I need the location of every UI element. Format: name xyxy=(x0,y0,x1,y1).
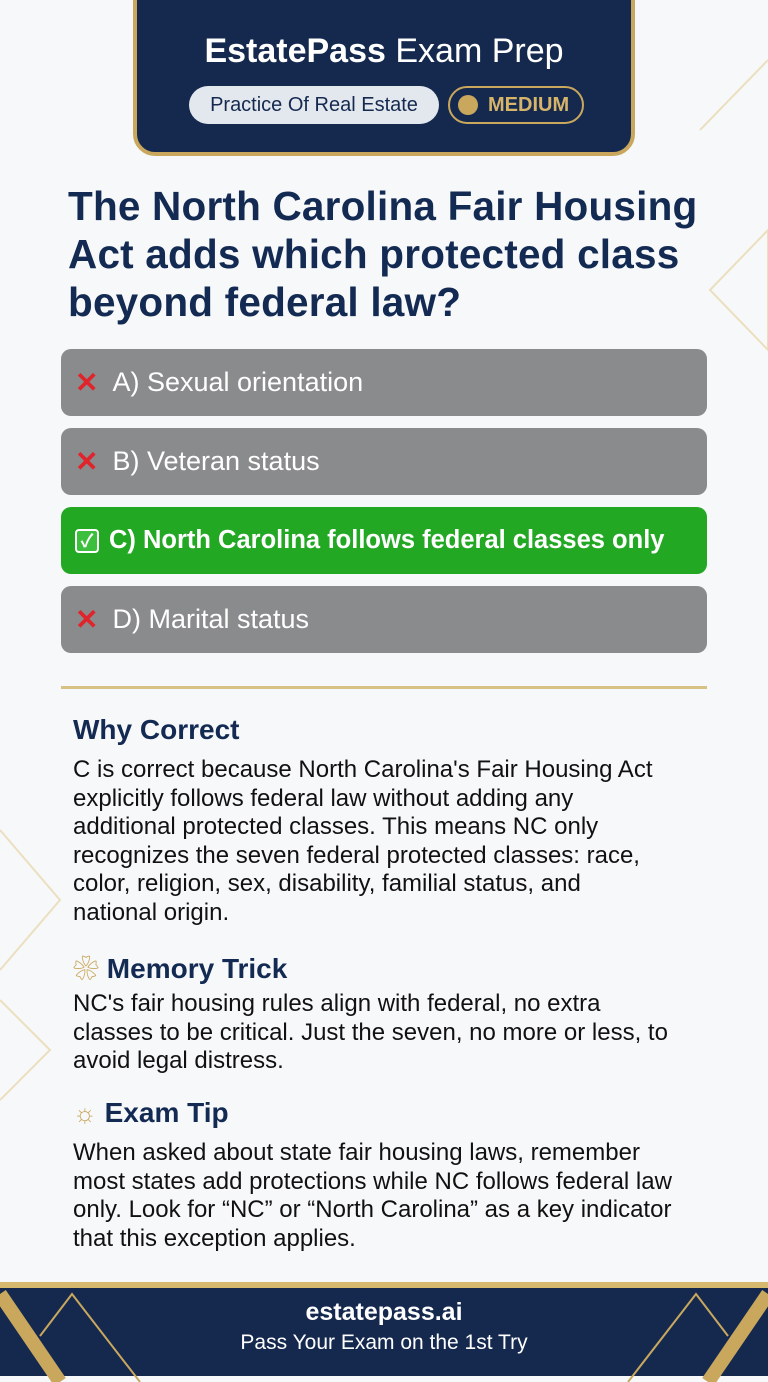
why correct text xyxy=(73,756,652,926)
memory trick text: avoid legal distress. xyxy=(73,1047,284,1074)
why correct text: recognizes the seven federal protected classes: race, xyxy=(73,842,640,868)
question: Act adds which protected class xyxy=(68,231,679,277)
option D: D) Marital status xyxy=(112,604,309,634)
why correct heading: Why Correct xyxy=(73,714,239,745)
category pill: Practice Of Real Estate xyxy=(210,94,418,116)
option A: ✕ xyxy=(75,367,98,398)
footer text: Pass Your Exam on the 1st Try xyxy=(240,1331,528,1354)
header title: EstatePass Exam Prep xyxy=(204,32,564,70)
why correct text: additional protected classes. This means NC only xyxy=(73,813,598,840)
exam tip text: most states add protections while NC follows federal law xyxy=(73,1168,672,1194)
footer text: estatepass.ai xyxy=(305,1298,463,1326)
question: The North Carolina Fair Housing xyxy=(68,183,697,229)
memory trick heading with brain icon: ❀ Memory Trick xyxy=(73,953,287,984)
exam tip text xyxy=(73,1139,672,1252)
option D: ✕ xyxy=(75,604,98,635)
option C correct: ✓ xyxy=(80,530,94,550)
exam tip text: that this exception applies. xyxy=(73,1224,356,1252)
option B: ✕ xyxy=(75,446,98,477)
footer xyxy=(0,1282,768,1376)
question: beyond federal law? xyxy=(68,279,461,325)
exam tip heading with bulb icon: ☼ Exam Tip xyxy=(73,1097,229,1128)
option A xyxy=(61,349,707,416)
why correct text: explicitly follows federal law without adding any xyxy=(73,784,573,812)
exam tip text: When asked about state fair housing laws, remember xyxy=(73,1139,640,1166)
why correct text: C is correct because North Carolina's Fair Housing Act xyxy=(73,756,652,783)
memory trick text: NC's fair housing rules align with federal, no extra xyxy=(73,990,601,1017)
memory trick text: classes to be critical. Just the seven, no more or less, to xyxy=(73,1018,668,1046)
exam tip text: only. Look for “NC” or “North Carolina” as a key indicator xyxy=(73,1196,671,1223)
option D xyxy=(61,586,707,653)
option A: A) Sexual orientation xyxy=(112,367,363,397)
footer text xyxy=(240,1298,528,1354)
category pill xyxy=(189,86,439,124)
header panel xyxy=(133,0,635,156)
memory trick text xyxy=(73,990,668,1074)
option B xyxy=(61,428,707,495)
why correct text: national origin. xyxy=(73,898,229,926)
option C correct xyxy=(61,507,707,574)
difficulty pill: MEDIUM xyxy=(488,94,569,116)
why correct text: color, religion, sex, disability, familial status, and xyxy=(73,870,581,897)
question xyxy=(68,183,697,325)
difficulty pill xyxy=(448,86,584,124)
option C correct: C) North Carolina follows federal classes only xyxy=(109,526,664,554)
option B: B) Veteran status xyxy=(112,446,320,476)
